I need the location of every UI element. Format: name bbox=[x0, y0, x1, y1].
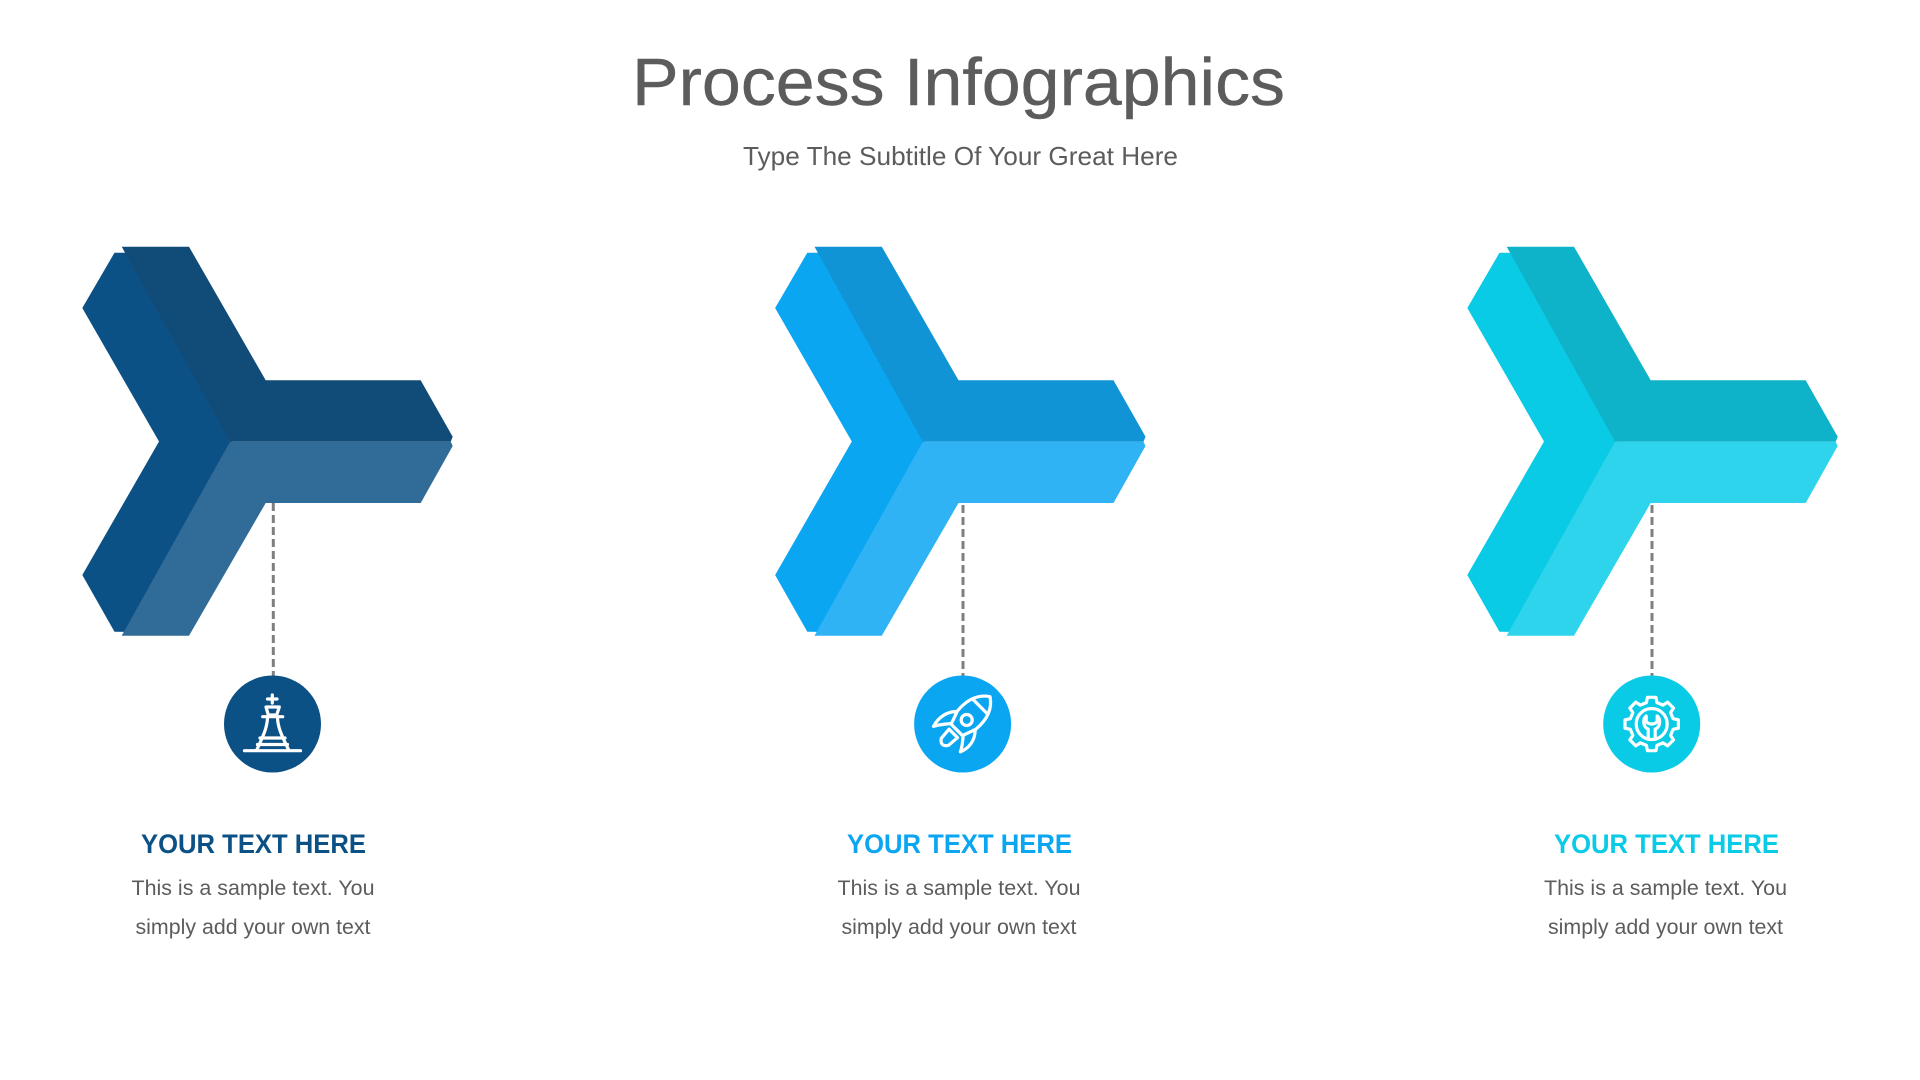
body text: This is a sample text. You bbox=[838, 877, 1080, 900]
heading: YOUR TEXT HERE bbox=[141, 829, 366, 859]
heading: YOUR TEXT HERE bbox=[1554, 829, 1779, 859]
arrow shape: blue bbox=[775, 247, 1146, 636]
connector line bbox=[1650, 505, 1654, 676]
connector line bbox=[962, 505, 964, 676]
body text: simply add your own text bbox=[1548, 916, 1783, 939]
panel: step 3 bbox=[1467, 247, 1838, 939]
icon: chess king bbox=[224, 676, 321, 772]
arrow shape: navy bbox=[82, 247, 453, 636]
subtitle: Type The Subtitle Of Your Great Here bbox=[743, 141, 1178, 171]
panel: step 2 bbox=[775, 247, 1146, 939]
title: Process Infographics bbox=[632, 45, 1285, 120]
icon: gear with wrench bbox=[1603, 676, 1700, 772]
body text: simply add your own text bbox=[842, 916, 1077, 939]
panel: step 1 bbox=[82, 247, 453, 939]
body text bbox=[1544, 877, 1787, 939]
connector line bbox=[272, 503, 275, 676]
icon: rocket bbox=[914, 676, 1011, 772]
body text bbox=[838, 877, 1080, 939]
body text: This is a sample text. You bbox=[132, 877, 374, 900]
body text bbox=[132, 877, 374, 939]
heading: YOUR TEXT HERE bbox=[847, 829, 1072, 859]
arrow shape: cyan bbox=[1467, 247, 1838, 636]
body text: simply add your own text bbox=[136, 916, 371, 939]
body text: This is a sample text. You bbox=[1544, 877, 1787, 900]
